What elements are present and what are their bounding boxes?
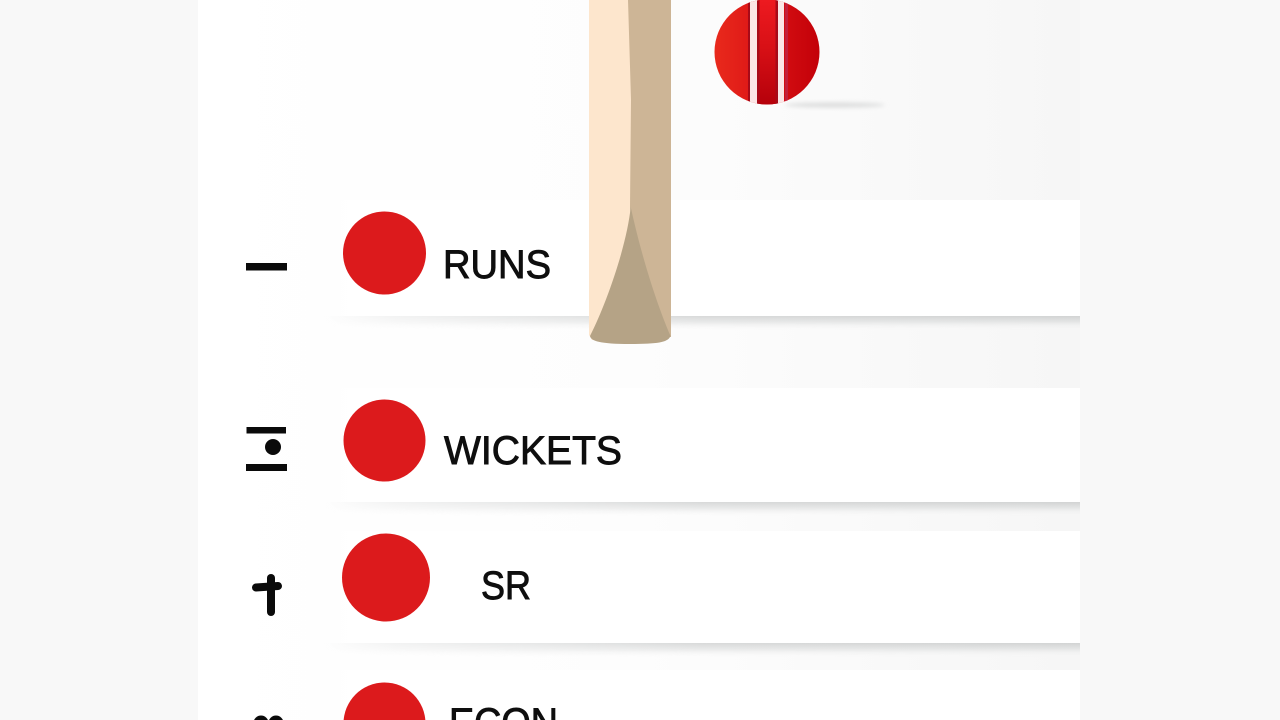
icon: cricket ball [714,0,821,106]
panel: background [198,0,1080,720]
label: SR: SR [481,564,531,608]
panel: strike rate row [256,531,1080,657]
strike rate red circle [342,534,430,622]
panel: wickets row [246,388,1080,516]
icon: runs dash [246,263,287,270]
label: wickets: WICKETS [444,429,622,473]
wickets red circle [344,400,426,482]
ball shadow [785,102,885,108]
label: runs: RUNS [443,243,551,287]
runs red circle [343,212,426,294]
economy red circle [344,682,426,720]
panel: economy row [254,670,1080,720]
icon: economy [254,716,284,720]
icon: cricket bat [589,0,671,344]
icon: wickets [246,427,287,471]
icon: cross [256,578,278,612]
panel: runs row [246,200,1080,330]
